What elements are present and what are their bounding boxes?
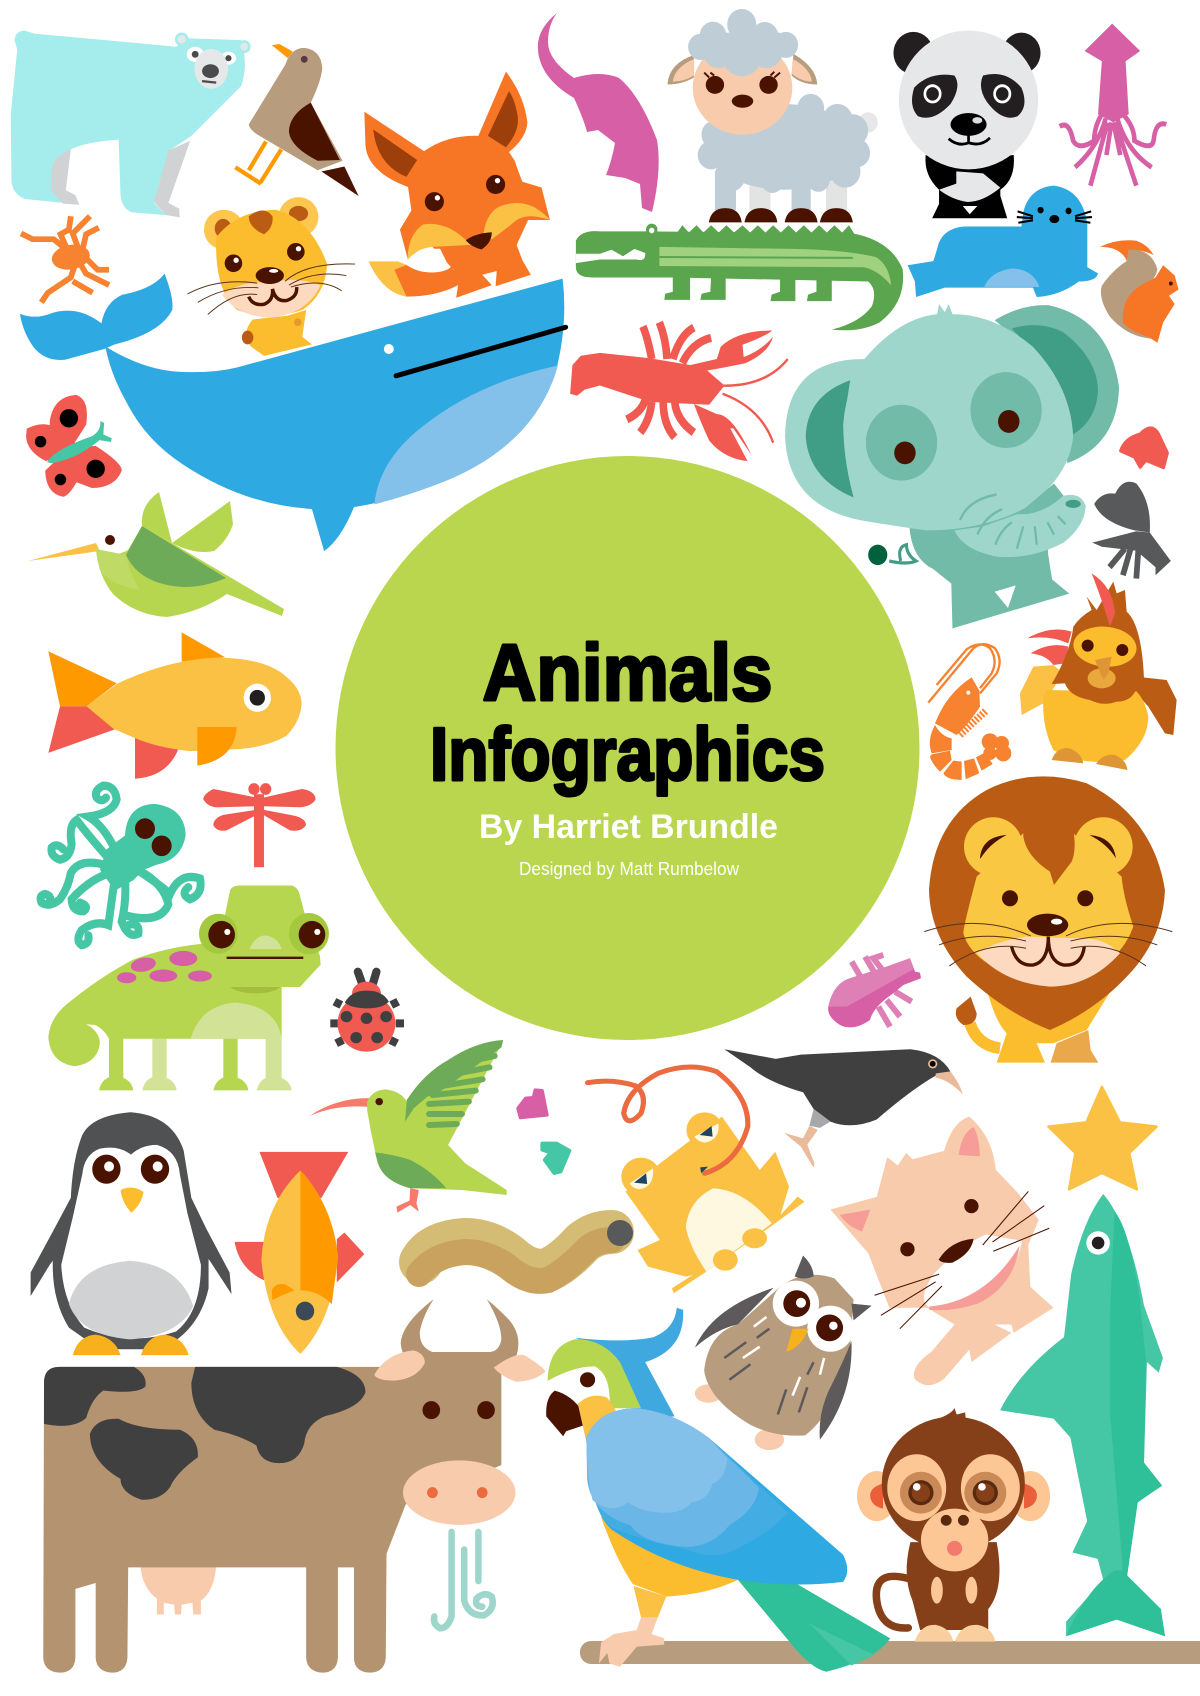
icon: seaweed squiggle: [434, 1532, 493, 1628]
icon: vertical fish: [235, 1152, 364, 1354]
icon: squirrel: [1100, 240, 1178, 343]
icon: dragonfly: [203, 783, 316, 867]
icon: orange string: [588, 1067, 748, 1173]
icon: butterfly: [26, 395, 122, 497]
icon: lobster: [570, 322, 788, 461]
icon: whale: [20, 274, 566, 551]
icon: pink dinosaur: [538, 13, 659, 212]
icon: fly: [1092, 482, 1171, 579]
icon: sheep: [667, 9, 878, 222]
icon: cat: [830, 1117, 1053, 1385]
title: Infographics: [430, 712, 825, 796]
icon: worm: [419, 1220, 633, 1281]
icon: pink blob: [518, 1090, 547, 1118]
designer credit: Designed by Matt Rumbelow: [519, 859, 740, 879]
icon: long-beaked hummingbird: [28, 492, 284, 617]
icon: frog: [621, 1112, 805, 1293]
icon: red heart: [1121, 428, 1167, 468]
icon: shark: [1000, 1194, 1165, 1636]
icon: seabird: [235, 44, 359, 196]
title: [430, 628, 825, 796]
author byline: By Harriet Brundle: [479, 808, 778, 846]
icon: chameleon: [48, 885, 329, 1090]
icon: fox: [364, 72, 550, 298]
icon: tiger cub: [188, 197, 355, 356]
icon: octopus: [41, 786, 201, 945]
icon: star: [1048, 1087, 1157, 1189]
title: Animals: [482, 628, 772, 717]
icon: crocodile: [576, 224, 903, 330]
icon: elephant: [785, 304, 1119, 628]
icon: crow: [724, 1049, 963, 1168]
icon: goldfish: [48, 632, 302, 779]
icon: green hummingbird: [310, 1040, 507, 1213]
icon: cow: [43, 1299, 545, 1673]
icon: panda: [893, 31, 1041, 218]
icon: ladybug: [330, 972, 404, 1052]
icon: spider: [21, 216, 109, 302]
icon: penguin: [31, 1112, 232, 1355]
icon: perch: [580, 1641, 1200, 1664]
icon: seal: [908, 186, 1098, 297]
icon: parrot: [546, 1308, 890, 1672]
icon: polar bear: [11, 31, 251, 217]
icon: owl: [695, 1255, 872, 1450]
icon: monkey: [857, 1408, 1050, 1642]
icon: pink bug: [828, 955, 921, 1027]
icon: rooster: [1020, 573, 1177, 770]
icon: teal blob: [542, 1143, 570, 1173]
icon: squid: [1060, 24, 1166, 186]
panel: title circle: [336, 456, 920, 1040]
icon: shrimp: [928, 644, 1011, 780]
icon: lion: [924, 776, 1172, 1063]
